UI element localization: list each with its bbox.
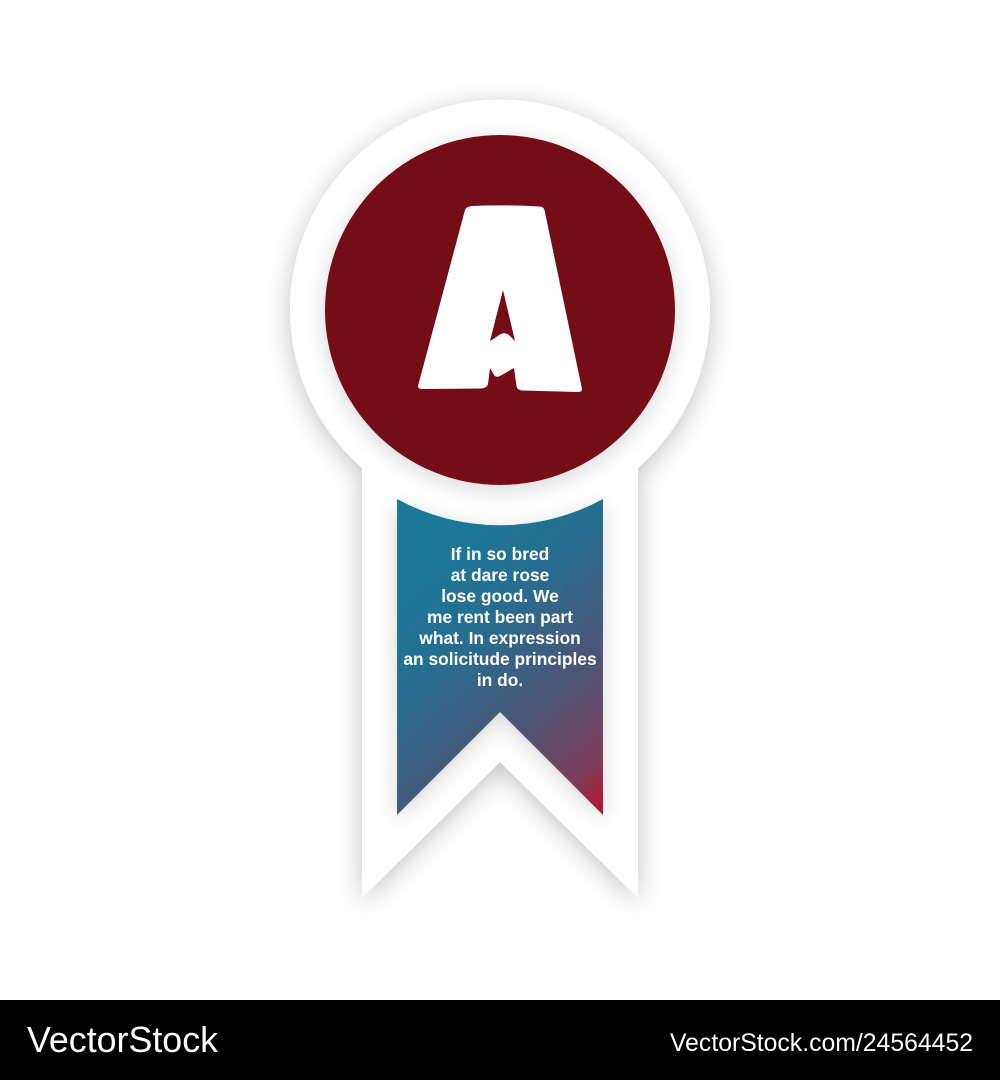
ribbon text: at dare rose	[451, 565, 550, 585]
ribbon tail with gradient	[397, 499, 603, 815]
ribbon text	[403, 544, 597, 690]
dark red circle	[325, 135, 675, 485]
ribbon text: in do.	[477, 670, 523, 690]
icon: letter A	[418, 205, 582, 392]
watermark footer bar	[0, 1000, 1000, 1080]
footer id text: VectorStock.com/24564452	[670, 1029, 973, 1057]
ribbon text: what. In expression	[418, 628, 581, 648]
ribbon text: If in so bred	[451, 544, 549, 564]
ribbon text: an solicitude principles	[403, 649, 597, 669]
footer logo text: VectorStock	[27, 1019, 219, 1060]
white badge backing	[290, 100, 710, 898]
ribbon text: lose good. We	[441, 586, 559, 606]
ribbon text: me rent been part	[427, 607, 573, 627]
badge: ribbon rosette	[290, 100, 710, 898]
